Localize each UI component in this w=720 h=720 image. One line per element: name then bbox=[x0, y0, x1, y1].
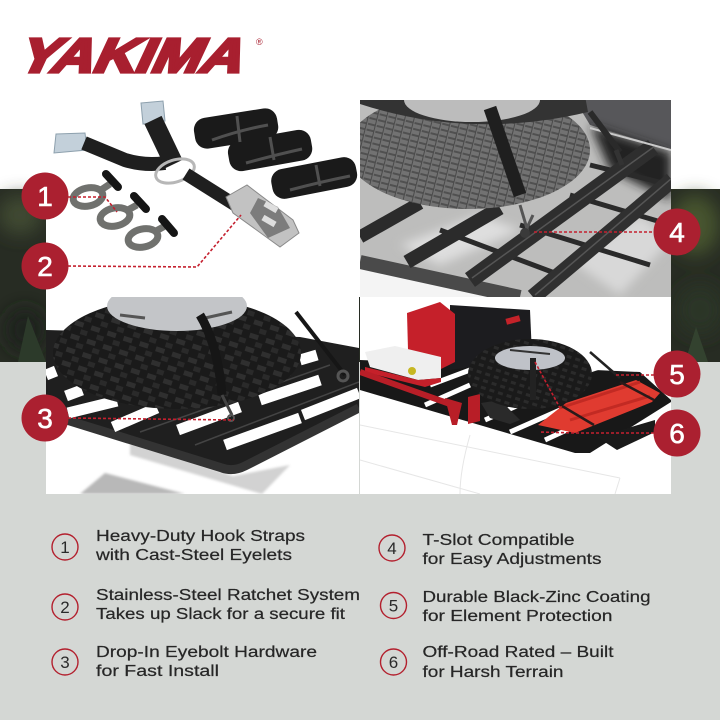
feature text 3: Drop-In Eyebolt Hardware bbox=[96, 644, 317, 661]
feature text 4 bbox=[422, 532, 602, 568]
callout 2: 2 bbox=[37, 251, 53, 282]
number badge 5: 5 bbox=[389, 596, 398, 616]
feature text 1: with Cast-Steel Eyelets bbox=[95, 547, 292, 564]
panel: product kit photo bbox=[46, 100, 360, 297]
strap and hook bbox=[200, 312, 348, 421]
feature 4 bbox=[379, 532, 602, 568]
feature text 6: Off-Road Rated – Built bbox=[422, 644, 614, 661]
feature text 6: for Harsh Terrain bbox=[422, 664, 564, 681]
callout 4: 4 bbox=[669, 217, 685, 248]
callout 1: 1 bbox=[37, 181, 53, 212]
number badge 1: 1 bbox=[60, 538, 70, 557]
feature text 5 bbox=[422, 589, 650, 625]
logo: Yakima: YAKIMA bbox=[10, 28, 259, 82]
callout 3: 3 bbox=[37, 403, 53, 434]
number badge 4 bbox=[379, 535, 405, 561]
number badge 4: 4 bbox=[387, 539, 397, 558]
feature text 2: Takes up Slack for a secure fit bbox=[96, 606, 346, 623]
gray backdrop bbox=[583, 100, 671, 149]
icon: stainless ratchet bbox=[226, 185, 299, 247]
vehicle shadow and windshield bbox=[80, 440, 290, 494]
red traction boards bbox=[538, 380, 660, 433]
strap and hook bbox=[490, 108, 622, 238]
feature 1 bbox=[52, 528, 305, 564]
background: white header bbox=[0, 0, 720, 190]
icon: eyebolts bbox=[71, 174, 174, 250]
panel: photo of all-terrain tire on rack bbox=[46, 281, 359, 494]
feature 5 bbox=[380, 589, 650, 625]
tire bbox=[54, 297, 301, 408]
icon: coiled straps bbox=[192, 107, 359, 201]
feature text 1 bbox=[95, 528, 305, 564]
callout 5: 5 bbox=[669, 359, 685, 390]
feature 2 bbox=[52, 587, 360, 623]
feature 3 bbox=[52, 644, 317, 680]
number badge 2: 2 bbox=[60, 598, 70, 617]
number badge 3 bbox=[52, 649, 78, 675]
vehicle body lines bbox=[360, 425, 620, 494]
feature 6 bbox=[380, 644, 614, 681]
feature text 2: Stainless-Steel Ratchet System bbox=[96, 587, 360, 604]
icon: cam buckles bbox=[54, 101, 165, 153]
icon: webbing strap bbox=[84, 120, 240, 208]
number badge 6: 6 bbox=[389, 653, 398, 672]
tire bbox=[468, 339, 620, 409]
number badge 5 bbox=[380, 592, 406, 618]
rack bbox=[46, 330, 359, 471]
rack bbox=[360, 360, 671, 453]
water case bbox=[365, 346, 441, 387]
callout 4 bbox=[654, 208, 700, 256]
callout 1 bbox=[22, 172, 68, 220]
logo: Yakima: ® bbox=[256, 37, 263, 47]
callout 3 bbox=[22, 394, 68, 442]
LED light bar bbox=[606, 420, 655, 450]
red hi-lift jack bbox=[360, 372, 480, 425]
feature text 5: Durable Black-Zinc Coating bbox=[422, 589, 650, 606]
feature text 3 bbox=[96, 644, 317, 680]
callout 5 bbox=[654, 350, 700, 398]
background: dark forest band bbox=[0, 189, 720, 362]
callout 6: 6 bbox=[669, 418, 685, 449]
number badge 2 bbox=[52, 594, 78, 620]
feature text 2 bbox=[96, 587, 360, 623]
callout 6 bbox=[654, 410, 700, 456]
feature text 4: T-Slot Compatible bbox=[422, 532, 574, 549]
feature text 4: for Easy Adjustments bbox=[422, 551, 602, 568]
number badge 1 bbox=[52, 534, 78, 560]
callout lines bbox=[68, 197, 654, 433]
red jerry can bbox=[407, 302, 455, 372]
rack bars bbox=[360, 128, 672, 297]
roof highlights bbox=[400, 125, 671, 295]
number badge 3: 3 bbox=[60, 653, 70, 672]
red box latch bbox=[505, 315, 521, 325]
panel: photo of T-slot tie-down on rack bbox=[360, 100, 671, 297]
feature text 5: for Element Protection bbox=[422, 608, 612, 625]
off-road shovel bbox=[481, 400, 520, 424]
tire bbox=[360, 100, 590, 209]
feature text 1: Heavy-Duty Hook Straps bbox=[96, 528, 305, 545]
callout 2 bbox=[22, 242, 68, 290]
feature text 6 bbox=[422, 644, 614, 681]
feature text 3: for Fast Install bbox=[96, 663, 219, 680]
number badge 6 bbox=[380, 649, 406, 675]
background: misty gray lower area bbox=[0, 362, 720, 720]
panel: photo of fully loaded rack bbox=[360, 297, 671, 494]
storage box bbox=[450, 305, 532, 370]
